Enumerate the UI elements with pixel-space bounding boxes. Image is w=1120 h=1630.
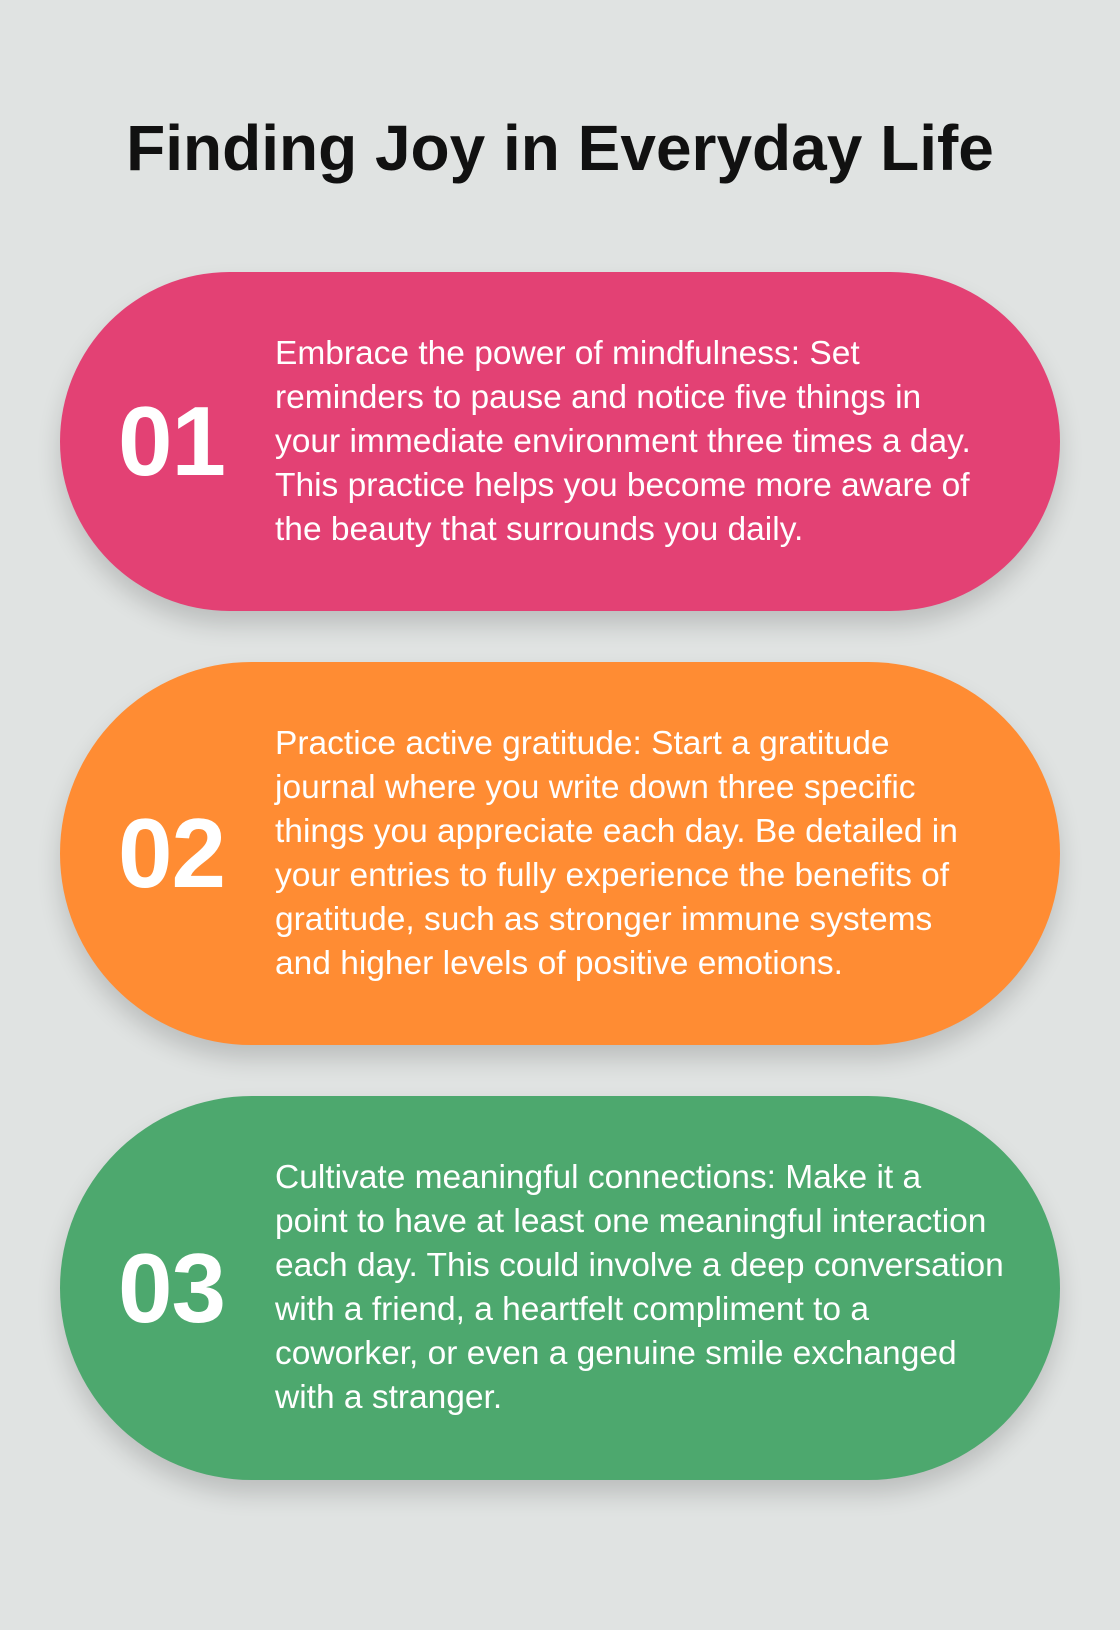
text: mindfulness <box>275 334 971 548</box>
text: connections: with a stranger. <box>275 1379 502 1416</box>
panel: step 02 <box>60 662 1060 1045</box>
title: Finding Joy in Everyday Life <box>126 112 994 184</box>
text: connections: each day. This could involve a deep conversation <box>275 1247 1004 1284</box>
panel: step 01 <box>60 272 1060 611</box>
text: connections: Cultivate meaningful connections: Make it a <box>275 1159 921 1196</box>
text: gratitude: your entries to fully experience the benefits of <box>275 856 949 894</box>
text: mindfulness: the beauty that surrounds you daily. <box>275 510 803 548</box>
text: gratitude: gratitude, such as stronger immune systems <box>275 900 932 938</box>
text: connections: coworker, or even a genuine smile exchanged <box>275 1335 957 1372</box>
number 01: 01 <box>118 386 225 496</box>
panel: step 03 <box>60 1096 1060 1480</box>
text: connections: with a friend, a heartfelt compliment to a <box>275 1291 869 1328</box>
text: mindfulness: your immediate environment three times a day. <box>275 422 971 460</box>
text: gratitude: journal where you write down three specific <box>275 768 916 806</box>
text: mindfulness: Embrace the power of mindfulness: Set <box>275 334 860 372</box>
text: gratitude <box>274 724 958 982</box>
number 02: 02 <box>118 798 225 908</box>
text: gratitude: Practice active gratitude: Start a gratitude <box>275 724 889 762</box>
text: gratitude: things you appreciate each day. Be detailed in <box>275 812 958 850</box>
text: connections: point to have at least one meaningful interaction <box>275 1203 986 1240</box>
text: mindfulness: reminders to pause and notice five things in <box>275 378 921 416</box>
text: mindfulness: This practice helps you become more aware of <box>275 466 970 504</box>
text: connections <box>275 1159 1004 1416</box>
text: gratitude: and higher levels of positive emotions. <box>275 944 843 982</box>
number 03: 03 <box>118 1232 225 1342</box>
